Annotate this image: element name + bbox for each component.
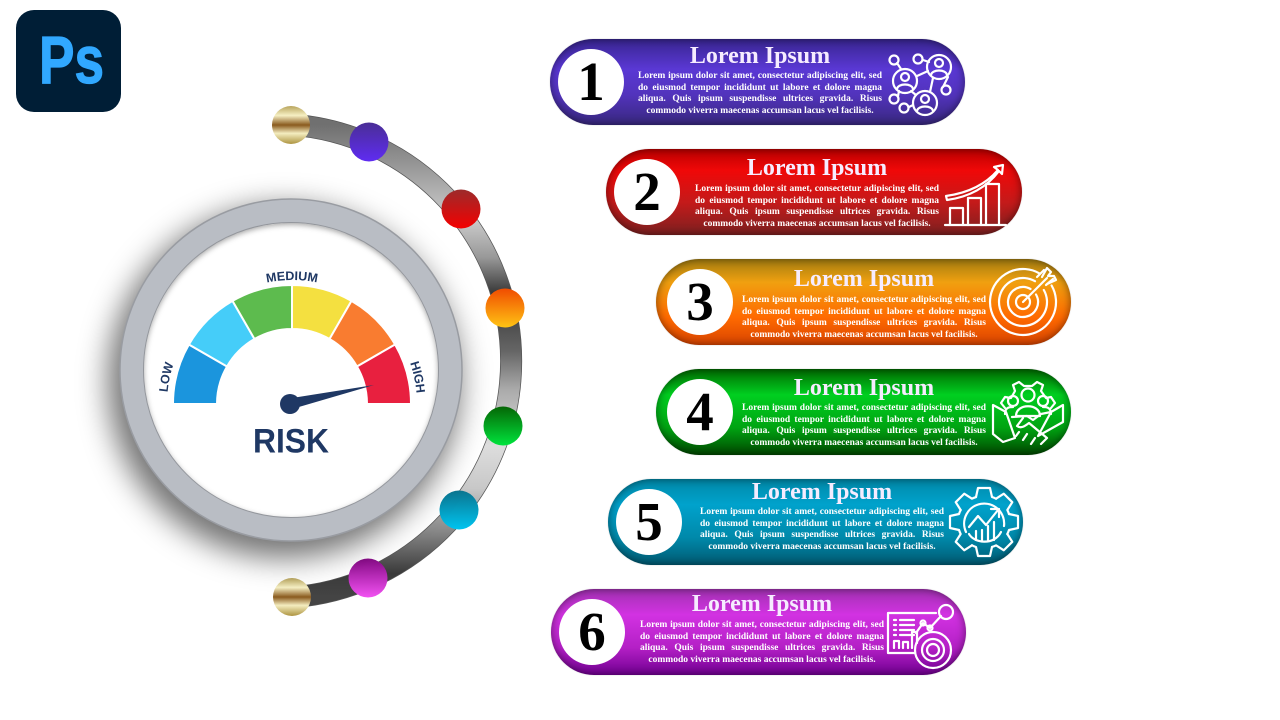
dot 3 orange — [486, 288, 524, 328]
panel: item 6 — [551, 589, 966, 675]
heading 1: Lorem Ipsum — [690, 43, 830, 69]
text block 5 — [700, 507, 944, 552]
number 3: 3 — [686, 271, 714, 332]
label MEDIUM: MEDIUM — [266, 271, 318, 282]
panel: item 3 — [656, 259, 1071, 345]
label HIGH: HIGH — [410, 361, 425, 392]
icon: gear with rising chart — [948, 486, 1020, 558]
text block 4: aliqua. Quis ipsum suspendisse ultrices gravida. Risus — [742, 426, 986, 436]
text block 6 — [640, 620, 884, 664]
gauge dial — [86, 184, 482, 580]
text block 2: aliqua. Quis ipsum suspendisse ultrices gravida. Risus — [695, 207, 939, 217]
text block 2: Lorem ipsum dolor sit amet, consectetur adipiscing elit, sed — [695, 184, 939, 194]
text block 2 — [695, 184, 939, 228]
text block 2: commodo viverra maecenas accumsan lacus vel facilisis. — [703, 218, 931, 228]
icon: target and arrow — [988, 266, 1058, 336]
number 5: 5 — [635, 491, 663, 552]
text block 6: aliqua. Quis ipsum suspendisse ultrices gravida. Risus — [640, 643, 884, 653]
heading 2: Lorem Ipsum — [747, 155, 887, 181]
panel: item 2 — [606, 149, 1022, 235]
panel: item 4 — [656, 369, 1071, 455]
heading 5: Lorem Ipsum — [752, 479, 892, 505]
icon: team handshake gear — [992, 380, 1064, 446]
number 4: 4 — [686, 381, 714, 442]
panel: item 1 — [550, 39, 965, 125]
curved metal track — [291, 125, 511, 597]
dot 5 teal — [440, 490, 478, 530]
text block 6: Lorem ipsum dolor sit amet, consectetur adipiscing elit, sed — [640, 620, 884, 630]
text block 1: commodo viverra maecenas accumsan lacus vel facilisis. — [646, 106, 874, 116]
number 3 — [667, 269, 733, 335]
needle — [280, 385, 374, 414]
gold end cap top — [272, 106, 310, 144]
number 6 — [559, 599, 625, 665]
number 1 — [558, 49, 624, 115]
text block 2: do eiusmod tempor incididunt ut labore et dolore magna — [695, 196, 939, 206]
text block 4: do eiusmod tempor incididunt ut labore et dolore magna — [742, 414, 986, 424]
icon: Photoshop logo — [16, 10, 121, 112]
text block 4: Lorem ipsum dolor sit amet, consectetur adipiscing elit, sed — [742, 403, 986, 413]
icon: people network — [888, 53, 952, 116]
text block 5: commodo viverra maecenas accumsan lacus vel facilisis. — [708, 542, 936, 552]
number 6: 6 — [578, 601, 606, 662]
dot 2 red — [442, 190, 480, 228]
text block 3: aliqua. Quis ipsum suspendisse ultrices gravida. Risus — [742, 318, 986, 328]
number 4 — [667, 379, 733, 445]
text block 4: commodo viverra maecenas accumsan lacus vel facilisis. — [750, 438, 978, 448]
text block 4 — [742, 403, 986, 448]
dot 4 green — [484, 406, 522, 446]
text block 5: aliqua. Quis ipsum suspendisse ultrices gravida. Risus — [700, 530, 944, 540]
heading 3: Lorem Ipsum — [794, 266, 934, 292]
panel: item 5 — [608, 479, 1023, 565]
gold end cap bottom — [273, 578, 311, 616]
text block 3: commodo viverra maecenas accumsan lacus vel facilisis. — [750, 330, 978, 340]
label LOW: LOW — [159, 361, 173, 392]
icon: growth bars — [944, 164, 1007, 226]
number 5 — [616, 489, 682, 555]
icon: Photoshop logo: Ps — [39, 23, 104, 98]
text block 5: Lorem ipsum dolor sit amet, consectetur adipiscing elit, sed — [700, 507, 944, 517]
text block 1: Lorem ipsum dolor sit amet, consectetur adipiscing elit, sed — [638, 71, 882, 81]
heading 4: Lorem Ipsum — [794, 375, 934, 401]
number 2 — [614, 159, 680, 225]
text block 1: aliqua. Quis ipsum suspendisse ultrices gravida. Risus — [638, 94, 882, 104]
text block 3: Lorem ipsum dolor sit amet, consectetur adipiscing elit, sed — [742, 295, 986, 305]
dot 1 purple — [350, 122, 388, 162]
dot 6 magenta — [348, 558, 388, 598]
text block 5: do eiusmod tempor incididunt ut labore et dolore magna — [700, 518, 944, 528]
text block 6: commodo viverra maecenas accumsan lacus vel facilisis. — [648, 654, 876, 664]
text block 1 — [638, 71, 882, 116]
text block 1: do eiusmod tempor incididunt ut labore et dolore magna — [638, 82, 882, 92]
text block 6: do eiusmod tempor incididunt ut labore et dolore magna — [640, 632, 884, 642]
heading 6: Lorem Ipsum — [692, 591, 832, 617]
icon: analytics dashboard — [886, 604, 954, 670]
text block 3 — [742, 295, 986, 340]
RISK label: RISK — [253, 423, 329, 461]
gauge segments — [173, 285, 411, 404]
number 2: 2 — [633, 161, 661, 222]
number 1: 1 — [577, 51, 605, 112]
gauge and arc panel — [16, 10, 524, 616]
text block 3: do eiusmod tempor incididunt ut labore et dolore magna — [742, 306, 986, 316]
